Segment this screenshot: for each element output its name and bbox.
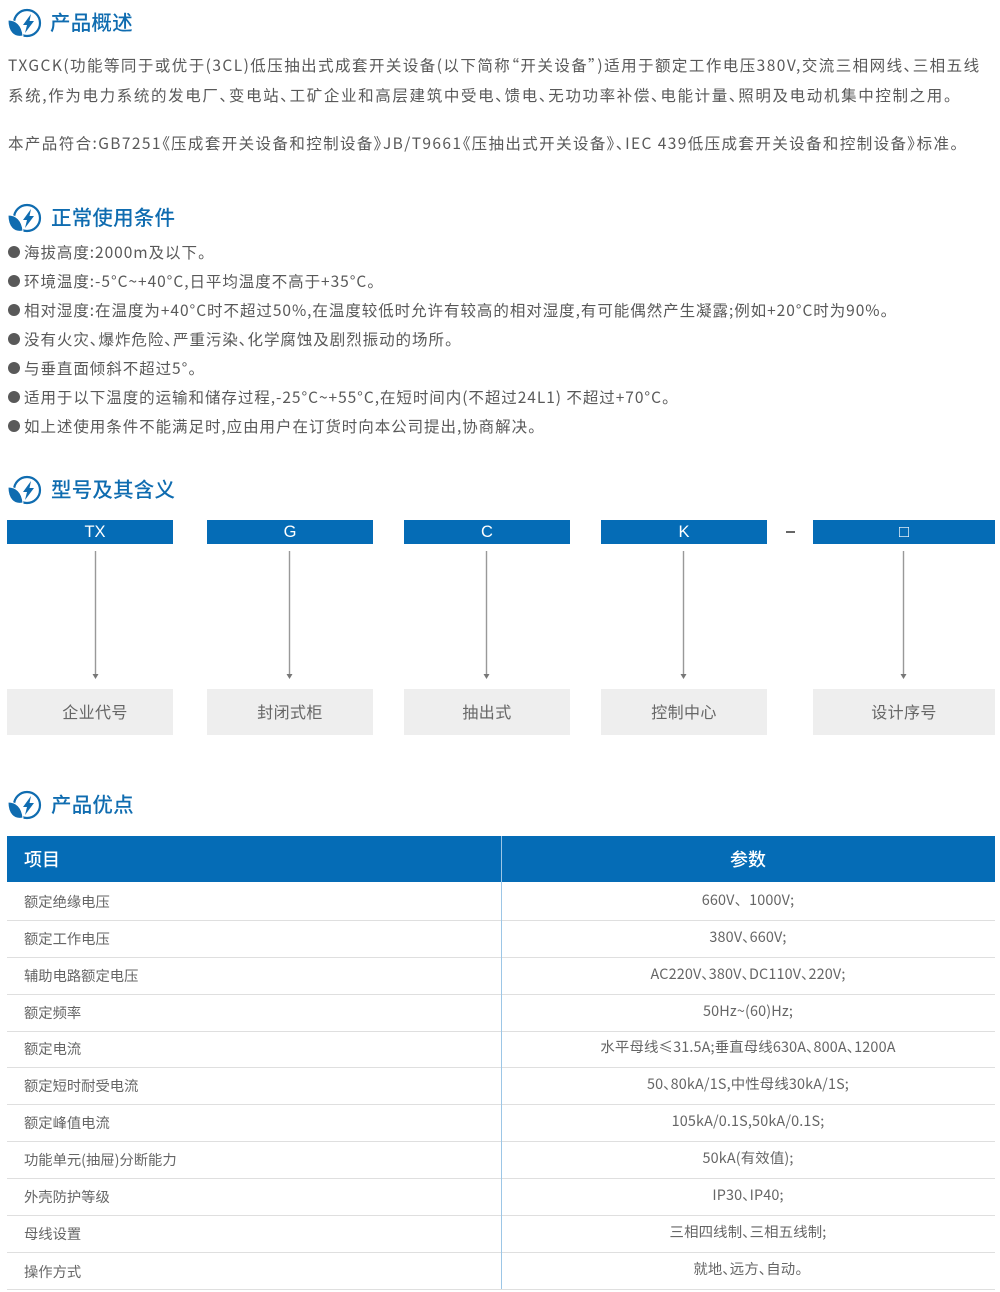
text block: overview paragraph line 2: 系统,作为电力系统的发电厂、变电站、工矿企业和高层建筑中受电、馈电、无功功率补偿、电能计量、照明及电动机集中控制之用。 xyxy=(8,84,953,106)
table header: 项目 xyxy=(24,846,60,872)
icon: leaf and lightning bolt xyxy=(8,204,42,232)
arrow: K xyxy=(680,551,686,679)
row: 额定电流: 水平母线≤31.5A;垂直母线630A、800A、1200A xyxy=(600,1036,896,1057)
list: usage conditions: 环境温度:-5°C~+40°C,日平均温度不高于+35°C。 xyxy=(24,270,376,292)
row: 功能单元(抽屉)分断能力: 50kA(有效值); xyxy=(702,1147,794,1168)
meaning: 企业代号: 企业代号 xyxy=(62,699,128,723)
row: 辅助电路额定电压 xyxy=(7,957,995,995)
code box: C: C xyxy=(481,523,493,541)
icon: leaf and lightning bolt xyxy=(8,8,42,38)
row: 辅助电路额定电压: 辅助电路额定电压 xyxy=(24,965,138,986)
heading: 产品概述: 产品概述 xyxy=(50,6,133,36)
code box: K xyxy=(601,520,767,544)
row: 母线设置: 母线设置 xyxy=(24,1223,81,1244)
row: 母线设置 xyxy=(7,1215,995,1253)
code box: C xyxy=(404,520,570,544)
arrow: TX xyxy=(92,551,98,679)
model code diagram xyxy=(7,520,995,735)
row: 额定峰值电流: 额定峰值电流 xyxy=(24,1112,110,1133)
row: 外壳防护等级 xyxy=(7,1178,995,1216)
icon: leaf and lightning bolt xyxy=(8,476,42,504)
row: 功能单元(抽屉)分断能力: 功能单元(抽屉)分断能力 xyxy=(24,1149,177,1170)
table header: 参数 xyxy=(730,846,766,872)
heading: 型号及其含义: 型号及其含义 xyxy=(51,473,175,503)
heading: 产品优点: 产品优点 xyxy=(51,788,134,818)
row: 额定短时耐受电流 xyxy=(7,1067,995,1105)
heading: 产品优点 xyxy=(8,788,134,820)
row: 额定绝缘电压: 额定绝缘电压 xyxy=(24,891,110,912)
text block: standards: 本产品符合:GB7251《压成套开关设备和控制设备》JB/T9661《压抽出式开关设备》、IEC 439低压成套开关设备和控制设备》标准。 xyxy=(8,132,960,154)
list: usage conditions: 与垂直面倾斜不超过5°。 xyxy=(24,357,197,379)
row: 额定频率: 50Hz~(60)Hz; xyxy=(703,1000,793,1021)
row: 额定频率 xyxy=(7,994,995,1032)
meaning: 抽出式: 抽出式 xyxy=(462,699,512,723)
row: 功能单元(抽屉)分断能力 xyxy=(7,1141,995,1179)
code box: G xyxy=(207,520,373,544)
row: 操作方式 xyxy=(7,1252,995,1290)
row: 操作方式: 就地、远方、自动。 xyxy=(693,1258,803,1279)
heading: 正常使用条件: 正常使用条件 xyxy=(51,201,175,231)
code box: placeholder: □ xyxy=(899,523,909,541)
text block: overview paragraph line 1: TXGCK(功能等同于或优于(3CL)低压抽出式成套开关设备(以下简称“开关设备”)适用于额定工作电压380V,交流三相网线、三相五线 xyxy=(8,54,981,76)
list: usage conditions: 适用于以下温度的运输和储存过程,-25°C~+55°C,在短时间内(不超过24L1) 不超过+70°C。 xyxy=(24,386,671,408)
code box: K: K xyxy=(678,523,690,541)
row: 额定峰值电流: 105kA/0.1S,50kA/0.1S; xyxy=(672,1110,824,1131)
arrow: C xyxy=(484,551,490,679)
row: 额定短时耐受电流: 50、80kA/1S,中性母线30kA/1S; xyxy=(647,1073,849,1094)
row: 额定绝缘电压 xyxy=(7,883,995,921)
row: 额定电流: 额定电流 xyxy=(24,1038,81,1059)
code box: TX xyxy=(7,520,173,544)
row: 额定工作电压: 380V、660V; xyxy=(709,926,787,947)
meaning: 封闭式柜 xyxy=(207,689,373,735)
code box: placeholder xyxy=(813,520,995,544)
row: 额定频率: 额定频率 xyxy=(24,1002,81,1023)
code box: TX: TX xyxy=(84,523,106,541)
row: 外壳防护等级: IP30、IP40; xyxy=(712,1184,784,1205)
arrow: G xyxy=(286,551,292,679)
meaning: 企业代号 xyxy=(7,689,173,735)
dash separator xyxy=(786,531,795,533)
meaning: 控制中心 xyxy=(601,689,767,735)
row: 额定工作电压: 额定工作电压 xyxy=(24,928,110,949)
list: usage conditions xyxy=(8,241,889,437)
row: 额定电流 xyxy=(7,1031,995,1068)
row: 外壳防护等级: 外壳防护等级 xyxy=(24,1186,110,1207)
meaning: 设计序号: 设计序号 xyxy=(871,699,937,723)
list: usage conditions: 没有火灾、爆炸危险、严重污染、化学腐蚀及剧烈振动的场所。 xyxy=(24,328,454,350)
row: 额定绝缘电压: 660V、1000V; xyxy=(702,889,794,910)
list: usage conditions: 如上述使用条件不能满足时,应由用户在订货时向本公司提出,协商解决。 xyxy=(24,415,537,437)
list: usage conditions: 相对湿度:在温度为+40°C时不超过50%,在温度较低时允许有较高的相对湿度,有可能偶然产生凝露;例如+20°C时为90%。 xyxy=(24,299,889,321)
meaning: 设计序号 xyxy=(813,689,995,735)
heading: 产品概述 xyxy=(8,6,133,38)
row: 额定短时耐受电流: 额定短时耐受电流 xyxy=(24,1075,138,1096)
column divider xyxy=(501,836,502,1289)
meaning: 封闭式柜: 封闭式柜 xyxy=(257,699,323,723)
row: 辅助电路额定电压: AC220V、380V、DC110V、220V; xyxy=(651,963,845,984)
meaning: 抽出式 xyxy=(404,689,570,735)
arrow: placeholder xyxy=(900,551,906,679)
table header xyxy=(7,836,995,882)
parameter table xyxy=(7,836,995,1290)
list: usage conditions: 海拔高度:2000m及以下。 xyxy=(24,241,207,263)
row: 母线设置: 三相四线制、三相五线制; xyxy=(670,1221,826,1242)
meaning: 控制中心: 控制中心 xyxy=(651,699,717,723)
row: 额定工作电压 xyxy=(7,920,995,958)
icon: leaf and lightning bolt xyxy=(8,790,42,820)
row: 操作方式: 操作方式 xyxy=(24,1261,81,1282)
code box: G: G xyxy=(284,523,296,541)
row: 额定峰值电流 xyxy=(7,1104,995,1142)
